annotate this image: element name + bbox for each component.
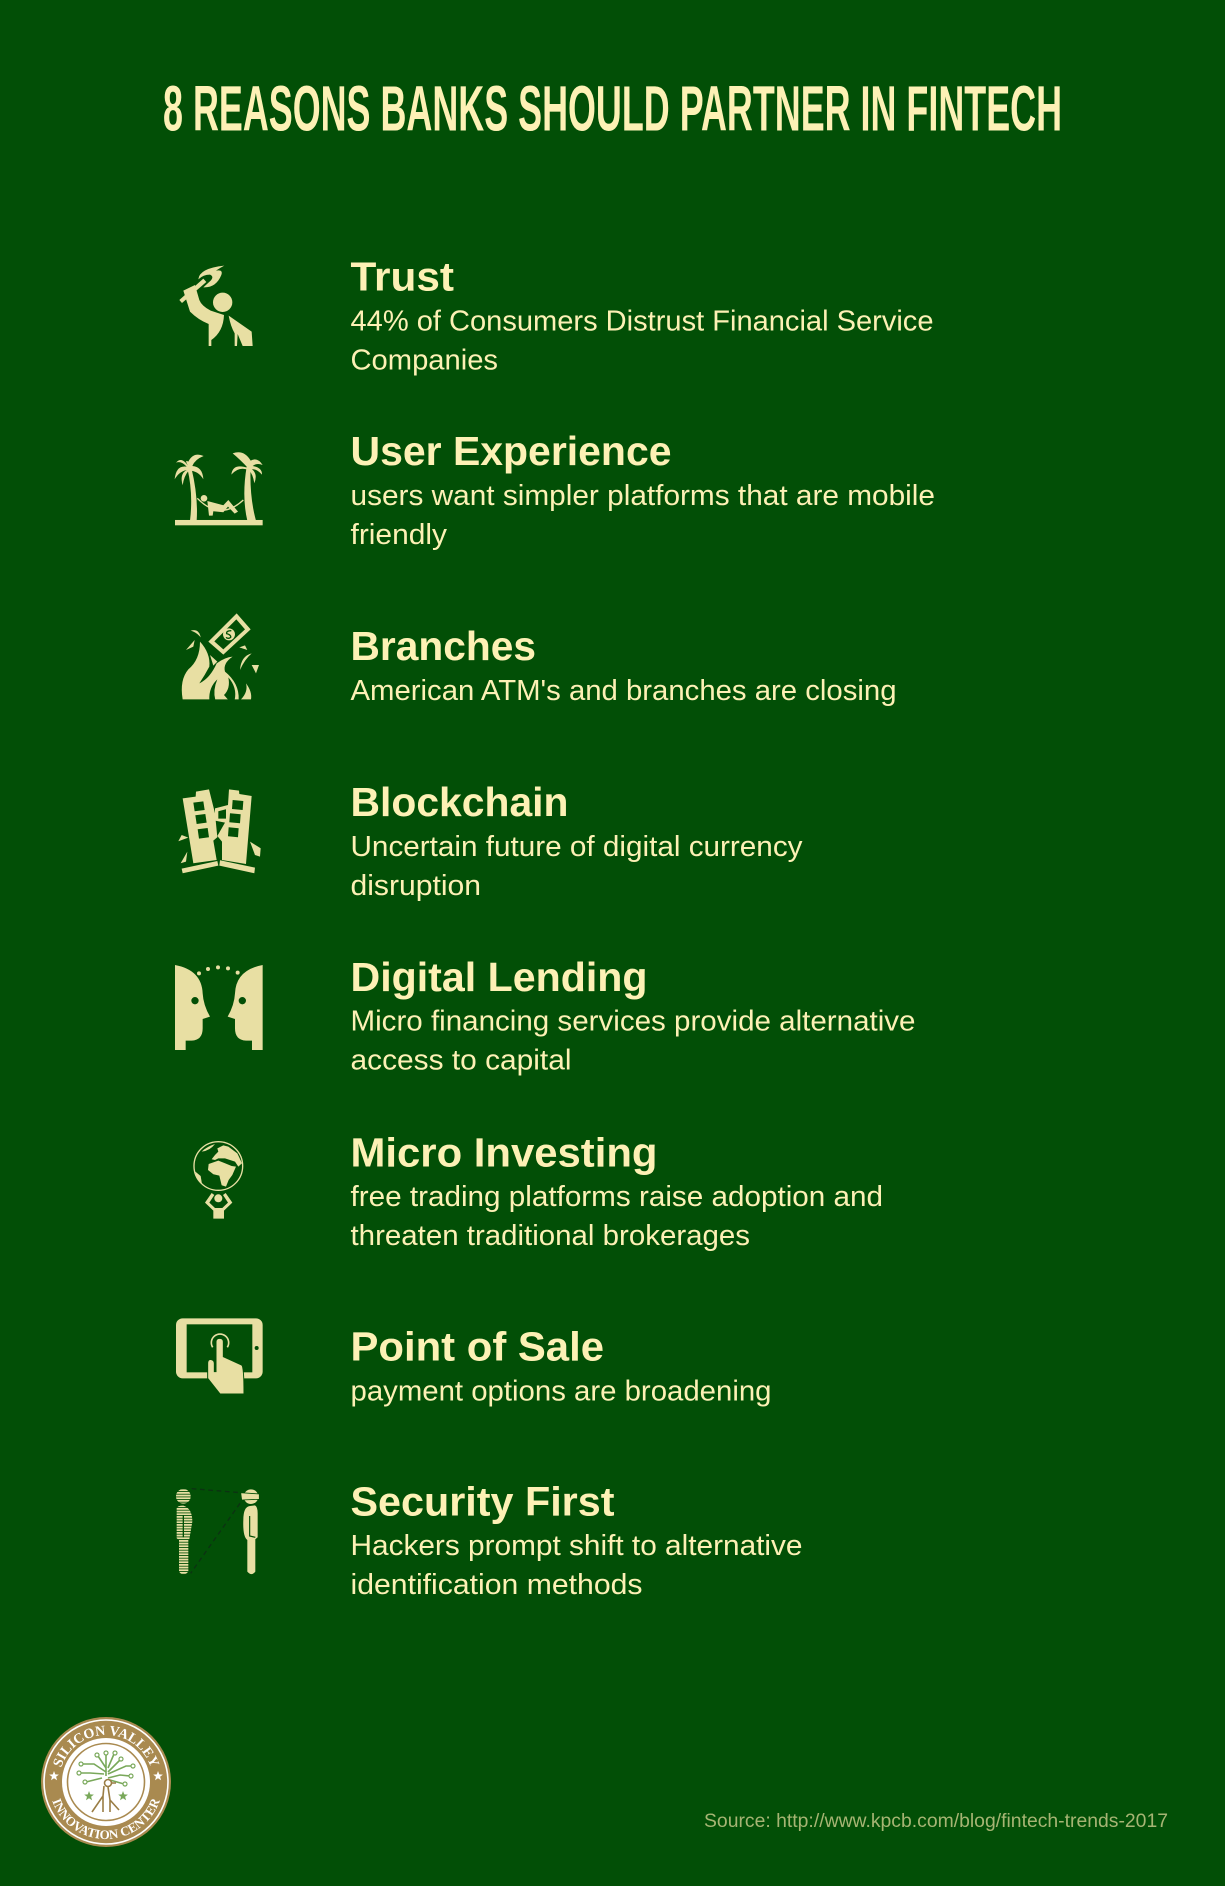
heading: User Experience bbox=[350, 428, 672, 474]
item: User Experience bbox=[175, 428, 935, 551]
icon: two facing heads bbox=[175, 965, 263, 1050]
description bbox=[350, 306, 934, 377]
heading: Point of Sale bbox=[350, 1323, 604, 1369]
description: 44% of Consumers Distrust Financial Service bbox=[350, 306, 934, 338]
description bbox=[350, 1530, 802, 1601]
description bbox=[350, 1006, 916, 1077]
item: Branches bbox=[182, 613, 897, 707]
description: Micro financing services provide alternative bbox=[350, 1006, 916, 1038]
description: threaten traditional brokerages bbox=[350, 1220, 750, 1252]
item: Digital Lending bbox=[175, 954, 915, 1077]
description: payment options are broadening bbox=[350, 1375, 772, 1407]
source note: Source: http://www.kpcb.com/blog/fintech-trends-2017 bbox=[704, 1811, 1168, 1832]
icon: burning money bbox=[182, 613, 259, 700]
item: Security First bbox=[176, 1478, 802, 1601]
description: American ATM's and branches are closing bbox=[350, 675, 896, 707]
item: Blockchain bbox=[178, 779, 803, 902]
heading: Security First bbox=[350, 1478, 615, 1524]
description: access to capital bbox=[350, 1045, 572, 1077]
logo: Silicon Valley Innovation Center: SILICON VALLEY bbox=[54, 1726, 160, 1767]
description: friendly bbox=[350, 519, 448, 551]
description: disruption bbox=[350, 870, 481, 902]
description: Uncertain future of digital currency bbox=[350, 831, 803, 863]
icon: collapsing building bbox=[178, 789, 261, 873]
icon: palm trees and hammock bbox=[175, 452, 263, 525]
item: Micro Investing bbox=[194, 1129, 883, 1252]
heading: Micro Investing bbox=[350, 1129, 658, 1175]
heading: Branches bbox=[350, 623, 536, 669]
heading: Trust bbox=[350, 253, 454, 299]
logo: Silicon Valley Innovation Center: INNOVATION CENTER bbox=[52, 1798, 160, 1840]
icon: person holding globe bbox=[194, 1142, 243, 1219]
item: Trust bbox=[179, 253, 933, 377]
logo: Silicon Valley Innovation Center bbox=[41, 1717, 171, 1847]
description: users want simpler platforms that are mobile bbox=[350, 480, 935, 512]
icon: scanned figures bbox=[176, 1489, 259, 1574]
description: free trading platforms raise adoption and bbox=[350, 1181, 883, 1213]
description: Hackers prompt shift to alternative bbox=[350, 1530, 802, 1562]
description: Companies bbox=[350, 345, 498, 377]
icon: hand tapping tablet bbox=[176, 1318, 263, 1394]
description bbox=[350, 480, 935, 551]
description bbox=[350, 831, 803, 902]
heading: Blockchain bbox=[350, 779, 568, 825]
description: identification methods bbox=[350, 1569, 642, 1601]
heading: Digital Lending bbox=[350, 954, 648, 1000]
icon: person raising torch bbox=[179, 266, 253, 346]
item: Point of Sale bbox=[176, 1318, 771, 1407]
description bbox=[350, 1181, 883, 1252]
